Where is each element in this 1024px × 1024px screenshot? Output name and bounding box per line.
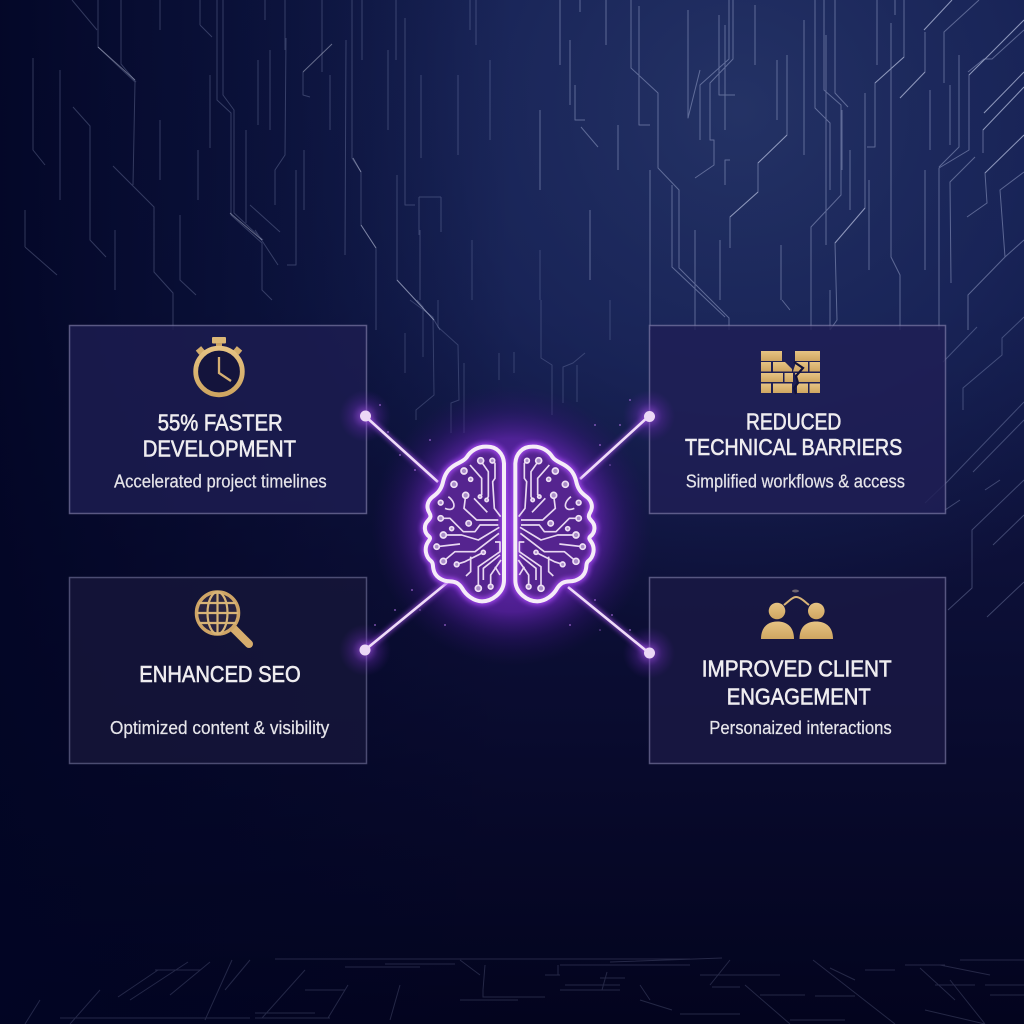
description: Personaized interactions	[709, 718, 892, 738]
heading: REDUCED	[746, 408, 841, 434]
speckle particles	[374, 399, 631, 631]
heading: ENGAGEMENT	[727, 683, 871, 709]
icon: globe with magnifier	[196, 592, 249, 644]
connector: bottom left	[360, 582, 448, 656]
icon: broken brick wall	[761, 351, 820, 394]
heading: TECHNICAL BARRIERS	[685, 434, 902, 460]
circuit traces: bright accents	[98, 0, 1024, 320]
circuit traces: centre	[405, 240, 610, 433]
panel: faster development	[70, 326, 366, 514]
brain glow halo	[339, 385, 675, 679]
heading	[685, 408, 902, 460]
panel: reduced technical barriers	[650, 326, 946, 514]
description: Simplified workflows & access	[686, 471, 905, 491]
brain right hemisphere	[515, 447, 594, 601]
icon: circuit brain	[425, 447, 594, 601]
description: Accelerated project timelines	[114, 472, 327, 492]
heading: IMPROVED CLIENT	[702, 656, 892, 682]
connector lines and nodes	[360, 410, 655, 658]
brain left hemisphere	[425, 447, 504, 601]
connector: top left	[360, 410, 438, 482]
circuit traces: upper right	[540, 0, 1024, 330]
heading: DEVELOPMENT	[143, 436, 296, 462]
panel: improved client engagement	[650, 578, 946, 764]
heading	[143, 410, 296, 462]
heading: ENHANCED SEO	[139, 661, 301, 687]
circuit traces: lower right	[925, 317, 1024, 617]
heading: 55% FASTER	[158, 410, 283, 436]
icon: stopwatch	[196, 337, 242, 395]
connector: top right	[580, 411, 655, 479]
heading	[702, 656, 892, 709]
panel: enhanced SEO	[70, 578, 366, 764]
circuit traces: upper left	[25, 0, 490, 330]
icon: connected clients	[761, 590, 833, 639]
description: Optimized content & visibility	[110, 718, 329, 738]
connector: bottom right	[568, 587, 655, 658]
circuit traces: bottom floor grid	[25, 958, 1024, 1024]
